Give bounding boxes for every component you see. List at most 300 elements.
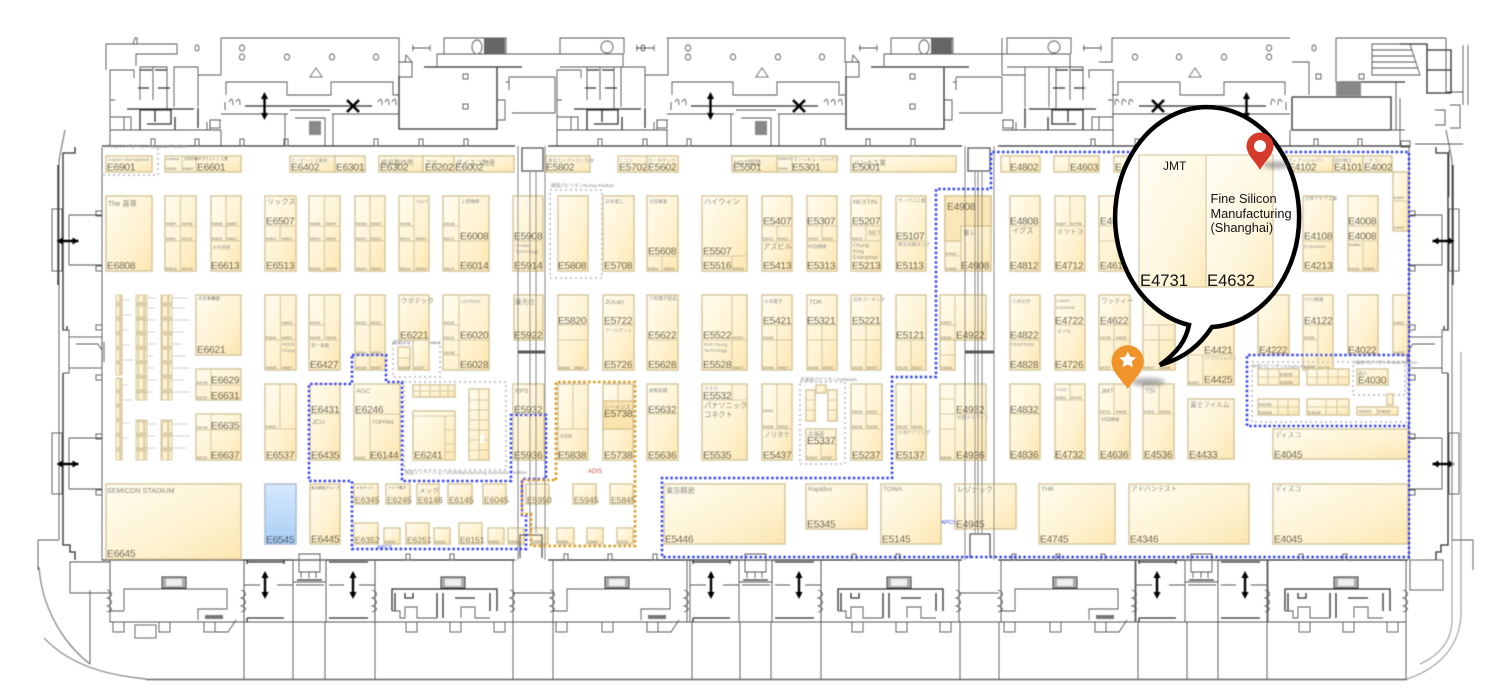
booth block E6008: 上野機構 bbox=[461, 198, 480, 205]
booth E4945: レゾナック bbox=[957, 485, 993, 494]
booth block E6707: E6712 bbox=[182, 237, 192, 241]
booth E6251 bbox=[406, 523, 432, 545]
booth block E6635: E6735 bbox=[197, 426, 207, 430]
booth block E4636: E4632 bbox=[1116, 410, 1126, 414]
booth E5301: ヴァッキュ・ジャパン bbox=[793, 156, 839, 163]
booth block E6408: E6411 bbox=[326, 237, 336, 241]
booth E5121: E5128 bbox=[897, 366, 907, 370]
booth block E5221: E5228 bbox=[852, 366, 862, 370]
booth block E6707: E6807 bbox=[166, 222, 176, 226]
booth block E5321: TDK bbox=[809, 299, 823, 306]
booth E4003: E4007 bbox=[1394, 196, 1404, 200]
booth block E5738 bbox=[603, 384, 633, 462]
booth E6221: クボテック bbox=[401, 297, 434, 305]
booth block E6427 bbox=[309, 295, 340, 371]
booth block E4622: E4727 bbox=[1100, 366, 1110, 370]
booth E6221: E6221 bbox=[400, 330, 429, 342]
booth block E4722: Loamo bbox=[1056, 298, 1070, 303]
booth E5121 bbox=[896, 295, 926, 370]
booth block E5207 bbox=[851, 196, 881, 272]
icon: red location pin bbox=[1246, 132, 1289, 170]
booth E5345: E5345 bbox=[807, 520, 836, 530]
booth E6601: E6601 bbox=[197, 162, 226, 174]
booth E6146 bbox=[417, 484, 443, 505]
booth block E6408: E6407 bbox=[326, 222, 336, 226]
Chubu and Fukui pavilions: 中部パビリオン/Chubu Pavilion bbox=[1252, 363, 1317, 370]
booth block E4732 bbox=[1055, 384, 1085, 461]
booth E6645 bbox=[106, 484, 241, 560]
booth E6002 bbox=[454, 156, 514, 174]
booth E4045 south bbox=[1273, 484, 1408, 546]
booth block E6020: E6124 bbox=[444, 336, 454, 340]
booth E5845: E5845 bbox=[611, 495, 636, 505]
manufacturing innovation pavilion bbox=[404, 382, 527, 476]
booth block E5722: E5726 bbox=[604, 360, 633, 371]
booth block E4636: E4636 bbox=[1100, 450, 1129, 461]
booth block E6328: E6327 bbox=[371, 366, 381, 370]
small booth E6254 bbox=[384, 528, 400, 544]
booth E6245 bbox=[386, 484, 412, 505]
booth row 2 bbox=[106, 182, 1378, 278]
booth block E4108: E4213 bbox=[1304, 261, 1333, 272]
booth block E5932: E5936 bbox=[514, 450, 543, 462]
booth block E4712 bbox=[1055, 196, 1085, 272]
booth E5121: E5127 bbox=[912, 366, 922, 370]
booth block E6635: E6637 bbox=[211, 450, 240, 462]
booth block E6408 bbox=[309, 196, 340, 271]
booth block E4712: E4708 bbox=[1071, 222, 1081, 226]
booth block E6635: E6737 bbox=[197, 456, 207, 460]
booth E6901: Sayam International bbox=[108, 157, 149, 162]
booth block E5437 bbox=[762, 384, 792, 462]
booth block E5908 bbox=[513, 196, 543, 272]
booth block E4712: E4807 bbox=[1056, 222, 1066, 226]
Chubu and Fukui pavilions: E4244 bbox=[1259, 410, 1272, 415]
booth block E5738: シーメンス bbox=[604, 404, 631, 411]
booth block E6020: E6028 bbox=[460, 360, 489, 371]
booth block E5421 bbox=[762, 295, 792, 370]
booth block E5237 bbox=[851, 384, 882, 462]
booth block E5407: E5413 bbox=[763, 261, 792, 272]
booth E6002: E6002 bbox=[455, 162, 484, 174]
booth block E6408: E6412 bbox=[310, 237, 320, 241]
booth block E6308: E6312 bbox=[356, 237, 366, 241]
Hokkaido pavilion booth E5337 bbox=[800, 376, 858, 464]
booth block E4421: E4421 bbox=[1204, 346, 1233, 356]
booth block E5107 bbox=[896, 196, 930, 272]
booth E6601: E6602 bbox=[183, 167, 193, 171]
building: south wing bbox=[39, 554, 1408, 680]
manufacturing innovation pavilion: 製造イノベーション2024/Manufacturing Innovation Pavilion bbox=[405, 469, 527, 476]
booth E4003: E4007 bbox=[1394, 226, 1404, 230]
booth block E6528: Group bbox=[282, 348, 295, 353]
booth E6146: E6146 bbox=[418, 495, 443, 505]
booth block E4122 bbox=[1303, 295, 1333, 370]
booth block E4732: E4729 bbox=[1071, 396, 1081, 400]
booth E5145: E5145 bbox=[882, 534, 911, 546]
booth block E5407: E5407 bbox=[763, 216, 792, 228]
booth E6301: E6301 bbox=[336, 162, 365, 174]
booth block E4932: 村田ドルフィン bbox=[957, 414, 989, 421]
callout booth E4632 bbox=[1206, 155, 1292, 290]
booth E5507: E5415 bbox=[733, 267, 743, 271]
booth block E5722 bbox=[603, 295, 634, 371]
booth E5608: E5614 bbox=[648, 267, 658, 271]
booth block E4908: E4924 bbox=[946, 252, 956, 256]
booth block E5437: E5437 bbox=[763, 450, 792, 462]
APCS pavilion dotted boundary bbox=[309, 355, 546, 549]
booth block E6308: E6313 bbox=[371, 267, 381, 271]
booth E5702: E5702 bbox=[619, 162, 648, 174]
Chubu and Fukui pavilions: E4031 bbox=[1359, 409, 1372, 414]
booth E4745: E4745 bbox=[1040, 534, 1069, 546]
booth E4745: THK bbox=[1041, 486, 1055, 493]
booth block E6613: E6607 bbox=[227, 222, 237, 226]
small booth E6051: E6051 bbox=[509, 540, 519, 544]
booth block E5137: E5131 bbox=[912, 425, 922, 429]
small booth E6152 bbox=[434, 528, 450, 544]
booth block E4622 bbox=[1099, 295, 1134, 370]
booth E6202: E6202 bbox=[425, 162, 454, 174]
booth E6145: E6145 bbox=[449, 495, 474, 505]
booth block E6528: E6521 bbox=[282, 336, 292, 340]
booth E5802: 東京エレクトロン九州 bbox=[548, 157, 594, 164]
Korea pavilion booth E5808: E5808 bbox=[558, 261, 587, 272]
booth block E4832: E4832 bbox=[1010, 405, 1039, 416]
Chubu and Fukui pavilions: 福井パビリオン/Fukui Pavilion bbox=[1355, 359, 1417, 366]
booth row 5 bbox=[106, 484, 1408, 560]
booth block E5632: 倉敷紡績 bbox=[649, 387, 668, 394]
booth block E4932: E5036 bbox=[941, 456, 951, 460]
booth block E4108 bbox=[1303, 195, 1338, 272]
booth block E6707: E6714 bbox=[182, 267, 192, 271]
booth block E5321: E5321 bbox=[807, 316, 836, 327]
booth E4101: E4101 bbox=[1334, 162, 1363, 174]
booth E5845 bbox=[610, 484, 636, 505]
booth E5301 bbox=[777, 156, 839, 174]
booth E6345 bbox=[354, 484, 380, 505]
booth block E4622: E4726 bbox=[1100, 336, 1110, 340]
booth block E5838: SSW bbox=[560, 434, 573, 440]
booth block E4908: E4928 bbox=[946, 267, 956, 271]
booth E4346 bbox=[1129, 484, 1249, 546]
booth block E5207: King bbox=[853, 249, 864, 255]
booth block E6208: E6214 bbox=[400, 267, 410, 271]
booth block E6507: E6513 bbox=[266, 261, 295, 272]
booth E4502: E4502 bbox=[1115, 162, 1144, 174]
booth block E5207: Enterprise bbox=[853, 255, 878, 261]
small booth E5751: E5751 bbox=[618, 540, 628, 544]
booth block E5207: SET bbox=[868, 230, 881, 237]
Bavarian pavilion outline bbox=[103, 143, 187, 175]
booth E4045 north: ディスコ bbox=[1275, 430, 1301, 439]
booth E4045 south: E4045 bbox=[1274, 534, 1303, 546]
booth E5446 bbox=[664, 484, 785, 546]
small booth E5952 bbox=[531, 528, 548, 544]
booth block E4722 bbox=[1055, 295, 1085, 371]
booth block E4122: E4226 bbox=[1304, 336, 1314, 340]
booth block E5820: E5827 bbox=[574, 366, 584, 370]
booth block E4832 bbox=[1010, 384, 1040, 461]
booth E6645: E6645 bbox=[107, 549, 136, 560]
booth E4603 bbox=[1054, 156, 1099, 174]
booth block E5207: Chung bbox=[853, 243, 869, 249]
booth block E5522: E5421 bbox=[733, 336, 743, 340]
booth block E4722: E4722 bbox=[1055, 316, 1084, 327]
booth block E6707: E6813 bbox=[166, 267, 176, 271]
booth block E6613: E6611 bbox=[227, 237, 237, 241]
booth E5608: E5608 bbox=[648, 246, 677, 258]
booth E4346: E4346 bbox=[1130, 534, 1159, 546]
booth E6002: ダイスコ物産 bbox=[456, 158, 496, 167]
Chubu and Fukui pavilions: E4240 bbox=[1259, 402, 1272, 407]
booth E4222: E4222 bbox=[1259, 346, 1288, 356]
booth block E5908: E5908 bbox=[514, 232, 543, 242]
callout booth E4632: (Shanghai) bbox=[1210, 220, 1273, 235]
booth block E4536 bbox=[1143, 384, 1174, 461]
booth block E4908: 東レ bbox=[963, 228, 976, 237]
booth E6601: Cosmos bbox=[166, 157, 179, 161]
booth block E5237: E5235 bbox=[867, 425, 877, 429]
icon: orange star pin bbox=[1112, 345, 1165, 389]
booth block E4421: ワコウジャパン bbox=[1205, 355, 1237, 361]
booth block E6427: E6426 bbox=[310, 336, 320, 340]
booth E6045 bbox=[483, 484, 509, 505]
booth block E4622: ワッティー bbox=[1101, 297, 1134, 305]
booth block E6208: E6207 bbox=[416, 237, 426, 241]
booth block E6629 bbox=[196, 369, 241, 402]
booth block E5307 bbox=[807, 196, 837, 272]
booth E5507: E5507 bbox=[703, 246, 732, 258]
booth E6151 bbox=[459, 523, 485, 545]
booth block E4122: E4126 bbox=[1319, 366, 1329, 370]
booth block E5908: E5914 bbox=[514, 261, 543, 272]
booth block E6020 bbox=[443, 295, 489, 371]
booth block E5307: E5307 bbox=[807, 216, 836, 228]
booth block E4421: E4427 bbox=[1189, 381, 1199, 385]
booth block E5307: 村田機械 bbox=[808, 243, 827, 250]
Korea pavilion booth E5808 bbox=[550, 182, 615, 278]
booth block E6246 bbox=[354, 384, 400, 462]
booth block E6528 bbox=[265, 295, 296, 370]
booth E6245: E6245 bbox=[387, 495, 412, 505]
booth E6645: SEMICON STADIUM bbox=[107, 486, 174, 495]
booth block E6308: E6314 bbox=[356, 267, 366, 271]
booth block E5421: E5425 bbox=[763, 336, 773, 340]
booth block E6328: E6324 bbox=[356, 351, 366, 355]
booth block E4932: E4936 bbox=[956, 450, 985, 462]
booth block E4008: E4014 bbox=[1364, 267, 1374, 271]
booth block E5522: Technology bbox=[704, 348, 728, 353]
booth block E4421 bbox=[1188, 295, 1237, 386]
booth row 1 bbox=[106, 156, 1408, 231]
small booth E6152: E6152 bbox=[435, 540, 445, 544]
small booth E5751 bbox=[617, 528, 633, 544]
booth block E6208: E6208 bbox=[400, 222, 410, 226]
booth E5922: 康光社 bbox=[515, 297, 535, 306]
booth block E6613: E6612 bbox=[212, 237, 222, 241]
booth E4222 bbox=[1258, 295, 1289, 356]
booth block E4822: E4828 bbox=[1010, 360, 1039, 371]
booth E4922: E5028 bbox=[941, 366, 951, 370]
booth E6808 bbox=[106, 196, 152, 272]
booth E4002 bbox=[1363, 156, 1393, 174]
booth row 4 bbox=[196, 369, 1408, 476]
booth block E5407: アズビル bbox=[763, 242, 792, 251]
booth block E6427: E6422 bbox=[310, 321, 320, 325]
booth block E5221: 日本コーキング bbox=[853, 296, 885, 303]
booth block E5107: サーパス工業 bbox=[898, 197, 926, 204]
booth block E4622: E4622 bbox=[1100, 316, 1129, 327]
callout outline bbox=[1115, 107, 1299, 365]
Chubu and Fukui pavilions bbox=[1252, 359, 1417, 422]
booth block E6008 bbox=[443, 196, 489, 272]
booth E6601 bbox=[165, 156, 241, 174]
booth E6402: エーピーシ工業所 bbox=[291, 157, 328, 164]
booth block E6328: E6328 bbox=[356, 366, 366, 370]
booth block E6246: TOPPAN bbox=[372, 420, 394, 426]
booth block E5722: アールテット bbox=[605, 328, 632, 334]
booth block E4023 bbox=[1393, 295, 1408, 355]
booth block E5820 bbox=[558, 295, 588, 370]
small booth E5951: E5951 bbox=[558, 540, 568, 544]
booth block E4421: E4425 bbox=[1204, 375, 1233, 386]
booth block E5932 bbox=[513, 384, 544, 462]
booth block E4122: E4122 bbox=[1304, 316, 1333, 327]
booth block E6635 bbox=[196, 414, 241, 462]
booth block E6629: E6629 bbox=[211, 376, 240, 386]
booth block E5522: E5427 bbox=[733, 366, 743, 370]
booth block E6020: USTRON bbox=[461, 299, 480, 304]
callout booth E4632: Manufacturing bbox=[1210, 206, 1292, 221]
small booth E5852 bbox=[587, 528, 603, 544]
booth block E6246: AGC bbox=[356, 388, 371, 395]
ADIS label: ADIS bbox=[588, 469, 602, 475]
booth block E4108: D-process bbox=[1304, 244, 1326, 249]
booth block E5632 bbox=[647, 384, 678, 462]
shaft structures crossing the hall bbox=[518, 146, 994, 560]
booth block E5437: E5432 bbox=[763, 409, 773, 413]
booth block E4712: E4712 bbox=[1055, 261, 1084, 272]
booth block E4722: Industrial bbox=[1056, 305, 1075, 310]
booth block E4908: E4908 bbox=[961, 261, 990, 272]
booth E5602: E5602 bbox=[648, 162, 677, 174]
booth E5802 bbox=[546, 156, 594, 174]
booth block E6528: E6527 bbox=[282, 366, 292, 370]
booth E6621: 大日本精密 bbox=[198, 295, 221, 302]
booth block E5738: E5738 bbox=[604, 409, 633, 420]
booth E6808: The 嵩専 bbox=[108, 199, 137, 208]
booth block E6208: E6213 bbox=[416, 267, 426, 271]
booth block E5207: E5212 bbox=[852, 237, 862, 241]
booth block E6507: リックス bbox=[267, 197, 296, 206]
booth block E4712: ミツトヨ bbox=[1057, 228, 1083, 236]
booth block E6020: E6020 bbox=[460, 330, 489, 342]
booth E4030: 武川 bbox=[1358, 370, 1367, 376]
small booth E6254: E6254 bbox=[385, 540, 395, 544]
booth block E6208 bbox=[399, 196, 429, 271]
booth E5001 bbox=[851, 156, 956, 174]
booth block E6507: E6512 bbox=[266, 237, 276, 241]
booth block E5137 bbox=[896, 384, 931, 462]
booth E6202 bbox=[423, 156, 454, 174]
booth block E5221: E5227 bbox=[867, 366, 877, 370]
booth E4922: E5026 bbox=[941, 336, 951, 340]
booth block E5321: E5327 bbox=[823, 366, 833, 370]
booth block E5407 bbox=[762, 196, 792, 272]
booth block E5221: E5221 bbox=[852, 316, 881, 327]
booth block E4108: 日本アドブ工業 bbox=[1305, 195, 1338, 202]
booth E5345: Rapidus bbox=[808, 486, 833, 493]
booth block E6427: 第一実業 bbox=[311, 342, 330, 349]
booth block E6246: E6144 bbox=[370, 450, 399, 462]
booth E5145: TOWA bbox=[883, 486, 903, 493]
booth block E5237: E5237 bbox=[852, 450, 881, 462]
booth block E6507: E6511 bbox=[282, 237, 292, 241]
booth block E5407: E5411 bbox=[778, 237, 788, 241]
Korea pavilion booth E5808: 韓国パビリオン/Korea Pavilion bbox=[551, 182, 615, 189]
callout booth E4632: E4632 bbox=[1207, 271, 1255, 290]
booth block E5237: E5232 bbox=[852, 410, 862, 414]
booth E6151: E6151 bbox=[460, 535, 485, 545]
booth block E6427: E6423 bbox=[326, 336, 336, 340]
booth block E4536: E4532 bbox=[1160, 410, 1170, 414]
booth E6302: 岐阜製作所 bbox=[381, 158, 414, 167]
booth block E5522: E5528 bbox=[703, 360, 732, 371]
callout booth E4731 bbox=[1139, 155, 1206, 290]
booth block E4008: E4008 bbox=[1348, 232, 1377, 242]
booth block E6020: E6125 bbox=[444, 321, 454, 325]
booth E4945 bbox=[955, 484, 1016, 530]
booth E4045 south: ディスコ bbox=[1275, 484, 1301, 493]
booth E5708 bbox=[603, 196, 634, 272]
booth E6352 bbox=[354, 523, 380, 545]
booth block E4822: 三井化学 bbox=[1012, 298, 1031, 305]
booth block E6408: E6414 bbox=[310, 267, 320, 271]
booth block E4612: E4612 bbox=[1100, 261, 1129, 272]
booth E4002: E4002 bbox=[1364, 162, 1393, 174]
booth block E4612: E4608 bbox=[1100, 216, 1129, 228]
booth E5501: E5501 bbox=[733, 162, 762, 174]
booth block E6613: E6608 bbox=[212, 222, 222, 226]
booth block E4908: E4908 bbox=[947, 202, 976, 213]
Hokkaido pavilion booth E5337: E5337 bbox=[822, 456, 832, 460]
booth E5301: E5401 bbox=[778, 167, 788, 171]
booth E6901 bbox=[106, 156, 152, 174]
booth block E6528: PEER bbox=[282, 342, 295, 347]
booth E5608 bbox=[647, 196, 678, 271]
booth block E6308: E6311 bbox=[371, 237, 381, 241]
booth E5802: E5802 bbox=[546, 162, 575, 174]
booth block E6208: TSCT bbox=[416, 199, 428, 204]
booth E5507 bbox=[702, 196, 747, 272]
booth block E5221 bbox=[851, 295, 885, 370]
Hokkaido pavilion booth E5337: 北海道 bbox=[808, 430, 825, 438]
booth block E4008: E4115 bbox=[1349, 267, 1359, 271]
booth block E6528: E6519 bbox=[282, 321, 292, 325]
booth E6445: 東京精密グループ bbox=[311, 485, 340, 490]
booth block E4822 bbox=[1010, 295, 1040, 371]
booth block E6008: E6114 bbox=[444, 267, 454, 271]
booth block E5738: E5738 bbox=[604, 450, 633, 462]
booth block E5838: E5838 bbox=[558, 450, 587, 462]
booth block E4622: E4628 bbox=[1116, 336, 1126, 340]
booth E4102 bbox=[1287, 156, 1333, 174]
booth E4802 bbox=[1001, 156, 1040, 174]
booth E4433: E4433 bbox=[1189, 450, 1218, 461]
booth block E5522 bbox=[702, 295, 747, 371]
booth E4102: ディアンジャパン bbox=[1288, 157, 1325, 164]
